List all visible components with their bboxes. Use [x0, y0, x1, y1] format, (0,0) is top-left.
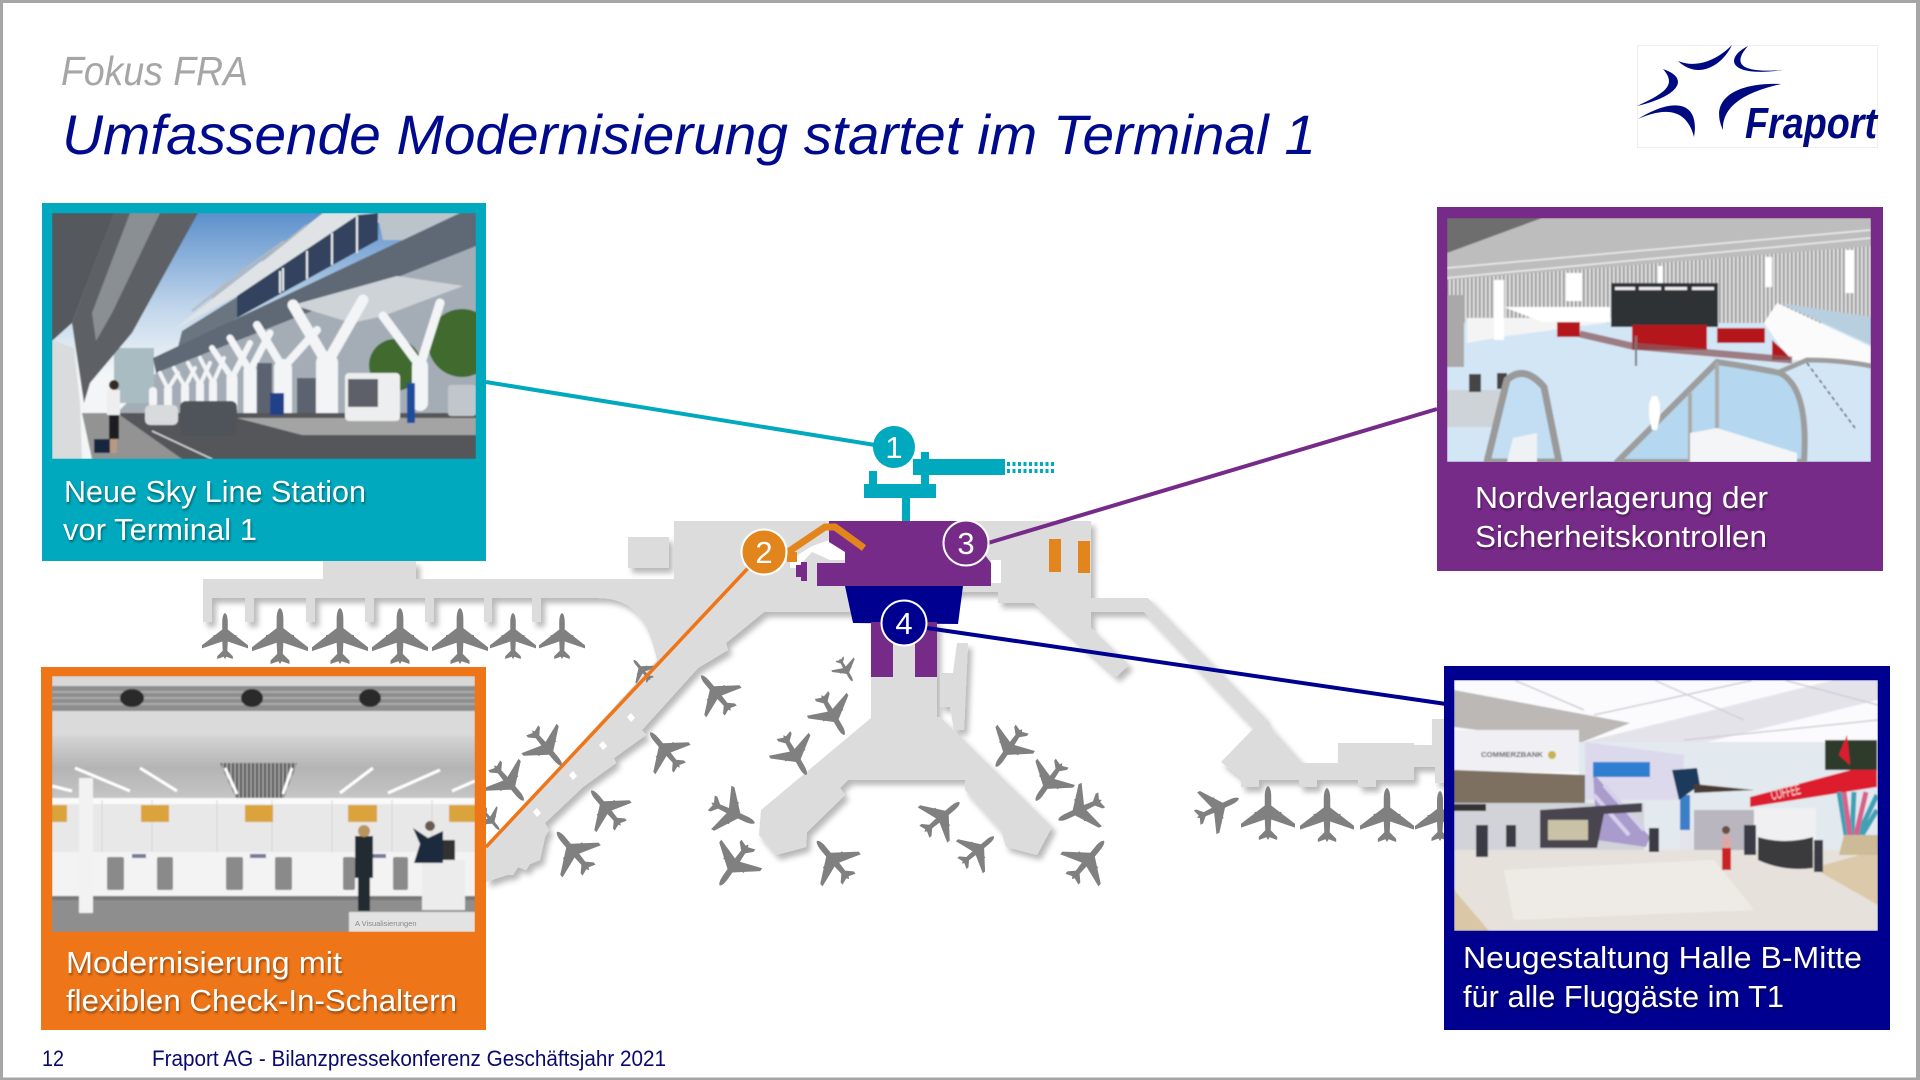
- caption 1: [63, 474, 366, 547]
- photo: hall B centre: COMMERZBANK: [1481, 752, 1543, 759]
- caption 4: Neugestaltung Halle B-Mitte: [1463, 940, 1862, 975]
- caption 3: Nordverlagerung der: [1475, 480, 1768, 515]
- marker 3: [944, 520, 988, 566]
- photo: check-in hall: A Visualisierungen: [355, 919, 417, 928]
- connector: marker 1 to panel 1: [486, 382, 875, 445]
- photo: hall B centre: COFFEE: [1769, 781, 1802, 804]
- panel 3: security: [1437, 207, 1883, 571]
- logo: Fraport: Fraport: [1745, 99, 1879, 148]
- white gaps: [790, 540, 845, 568]
- photo: security hall: [1447, 218, 1871, 462]
- panel 4: hall B centre: [1444, 666, 1890, 1030]
- marker 2: [742, 530, 786, 574]
- sky line station (teal): [864, 452, 1055, 522]
- footer: source line: Fraport AG - Bilanzpressekonferenz Geschäftsjahr 2021: [152, 1046, 666, 1071]
- caption 1: vor Terminal 1: [63, 512, 257, 547]
- footer: page number: 12: [42, 1046, 64, 1071]
- caption 2: flexiblen Check-In-Schaltern: [66, 983, 457, 1018]
- caption 4: für alle Fluggäste im T1: [1463, 979, 1784, 1014]
- marker 4: 4: [895, 606, 913, 641]
- connector: marker 3 to panel 3: [988, 409, 1437, 543]
- caption 2: Modernisierung mit: [66, 945, 342, 980]
- logo: Fraport: [1637, 45, 1879, 148]
- marker 1: [873, 426, 915, 468]
- caption 4: [1463, 940, 1862, 1014]
- panel 2: check-in: [41, 667, 486, 1030]
- terminal map: [202, 382, 1465, 900]
- caption 1: Neue Sky Line Station: [64, 474, 366, 509]
- aircraft: [202, 608, 1465, 900]
- panel 1: Sky Line Station: [42, 203, 496, 561]
- marker 2: 2: [755, 535, 773, 570]
- photo: check-in hall: [52, 676, 475, 932]
- check-in areas (orange): [787, 527, 1090, 573]
- terminal building footprint: [203, 521, 1445, 882]
- security area (purple): [817, 521, 991, 586]
- kicker: Fokus FRA: Fokus FRA: [61, 48, 248, 94]
- connector: marker 4 to panel 4: [927, 628, 1446, 704]
- caption 3: Sicherheitskontrollen: [1475, 519, 1767, 554]
- title: Umfassende Modernisierung startet im Terminal 1: [62, 103, 1316, 166]
- marker 1: 1: [885, 430, 903, 465]
- photo: sky line station: [52, 213, 476, 459]
- connector: marker 2 to panel 2: [486, 566, 750, 847]
- marker 3: 3: [957, 526, 975, 561]
- hall B centre (blue): [845, 586, 963, 624]
- gate pier section (purple): [871, 622, 937, 677]
- photo: hall B centre: [1454, 680, 1878, 931]
- caption 3: [1475, 480, 1768, 554]
- marker 4: [882, 600, 926, 646]
- caption 2: [66, 945, 457, 1018]
